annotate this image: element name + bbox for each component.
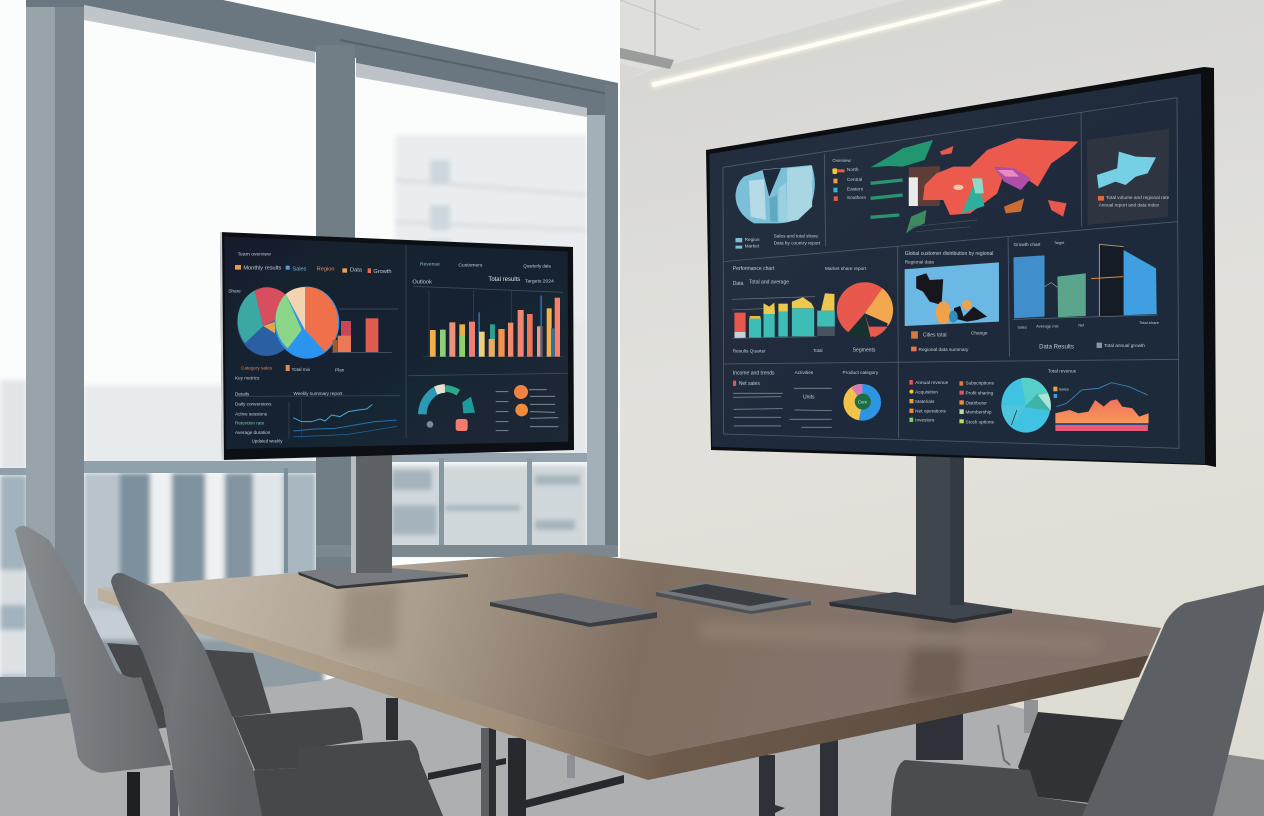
bottom legends: Net operations (915, 409, 947, 414)
bottom left list: Activities (795, 370, 814, 375)
small monitor headings: Key metrics (235, 375, 260, 380)
small monitor headings: Region (317, 267, 335, 273)
bottom legends: Sales (1059, 387, 1069, 392)
legend: globe: Sales and total share (774, 234, 818, 239)
bottom legends: Subscriptions (966, 380, 994, 385)
pie chart teal (1001, 378, 1051, 433)
bottom legends: Investors (915, 418, 935, 423)
small monitor headings: Targets 2024 (525, 278, 554, 284)
legend: globe: Region (745, 237, 760, 242)
small monitor headings: Team overview (238, 251, 271, 257)
stacked bar chart: Data (733, 281, 744, 287)
small monitor headings: Daily conversions (235, 401, 272, 406)
inset chart: Annual report and data index (1099, 203, 1160, 208)
bar chart blue and green: Average mix (1036, 323, 1059, 328)
bottom legends: Materials (915, 399, 935, 404)
map panel: Cities total (923, 333, 947, 339)
map panel: Regional data (905, 259, 934, 264)
monitor stand: large (829, 455, 1012, 623)
small monitor headings: Updated weekly (252, 438, 283, 443)
stacked bar chart: Segments (853, 347, 876, 353)
bottom legends: Membership (966, 409, 992, 414)
small monitor line chart (289, 398, 397, 438)
legend: globe: Data by country report (774, 240, 821, 245)
small monitor headings: Weekly summary report (293, 391, 343, 396)
area chart (1055, 383, 1149, 431)
bottom left list: Units (803, 395, 815, 401)
small monitor gauge (422, 388, 475, 431)
small monitor pie front (275, 287, 339, 359)
legend: globe: Eastern (847, 186, 864, 191)
stacked bar chart: Market share report (825, 266, 867, 271)
small monitor pie back (237, 287, 296, 356)
donut chart (843, 384, 881, 421)
chair: far left back (15, 526, 171, 773)
inset chart (1087, 129, 1170, 225)
map panel: Regional data summary (919, 347, 969, 352)
large monitor (706, 67, 1216, 467)
small monitor headings: Plan (335, 367, 345, 372)
bottom legends: Acquisition (915, 390, 938, 395)
map panel: Change (971, 330, 988, 335)
bar chart blue and green: Growth chart (1013, 242, 1041, 247)
bar chart blue and green: Target (1054, 241, 1064, 245)
small monitor headings: Average duration (235, 430, 271, 435)
bottom legends (909, 368, 1077, 424)
ceiling (223, 0, 905, 83)
stacked bar chart: Results Quarter (733, 349, 766, 354)
legend: globe: Southern (847, 195, 866, 200)
stacked bar chart: Performance chart (733, 266, 775, 272)
map panel (905, 251, 999, 352)
chair: far left seat (107, 643, 363, 770)
small monitor headings: Customers (458, 263, 483, 269)
pie chart (837, 282, 893, 338)
small monitor headings: Total results (488, 277, 520, 283)
stacked bar chart: Total and average (749, 279, 789, 285)
world map (871, 138, 1078, 233)
donut chart: Core (858, 399, 868, 404)
small monitor headings: Growth (373, 269, 392, 275)
legend: globe: Market (745, 243, 760, 248)
small monitor headings: Monthly results (243, 266, 282, 272)
bottom legends: Distributor (966, 400, 987, 405)
bar chart blue and green: Total annual growth (1104, 343, 1145, 348)
bottom legends: Stock options (966, 419, 995, 424)
bottom left list: Net sales (739, 381, 760, 387)
legend: globe: Central (847, 177, 862, 182)
small monitor (220, 232, 574, 460)
window with blurred city view (0, 0, 620, 720)
small monitor headings: Quarterly data (523, 264, 551, 269)
small monitor headings: Outlook (412, 280, 432, 286)
chair: right (891, 585, 1264, 816)
bar chart blue and green: Sales (1018, 325, 1027, 329)
window frame (0, 0, 618, 722)
small monitor side bars (332, 309, 398, 353)
small monitor bar chart (423, 290, 563, 357)
legend: globe: Overview (832, 158, 852, 163)
monitor stand: small (298, 452, 468, 589)
small monitor headings (228, 251, 554, 443)
bar chart blue and green: Data Results (1039, 345, 1074, 351)
small monitor orange dots (496, 385, 558, 431)
table (98, 552, 1161, 780)
ceiling light strips (336, 0, 1006, 88)
small monitor headings: Retention rate (235, 421, 265, 426)
bar chart blue and green: Total share (1139, 320, 1160, 325)
small monitor headings: Details (235, 392, 250, 397)
bottom left list: Product category (843, 370, 879, 375)
small monitor headings: Sales (292, 266, 307, 272)
bar chart blue and green (1013, 241, 1160, 351)
chair: near left (111, 573, 443, 816)
inset chart: Total volume and regional rate (1106, 195, 1170, 200)
wall (600, 0, 1264, 816)
stacked bar chart (732, 266, 876, 354)
bottom legends: Annual revenue (915, 380, 949, 385)
small monitor headings: Total mix (292, 367, 311, 372)
floor (0, 600, 1264, 816)
keyboard on table (656, 582, 811, 614)
panel: globe (735, 165, 815, 223)
small monitor headings: Category sales (241, 366, 273, 371)
bar chart blue and green: Net (1078, 324, 1084, 328)
bottom left list: Income and trends (733, 371, 775, 377)
large monitor screen (709, 73, 1205, 464)
small monitor headings: Active sessions (235, 411, 268, 416)
small monitor headings: Share (228, 289, 241, 294)
small monitor headings: Revenue (420, 262, 440, 268)
stacked bar chart: Total (813, 348, 822, 353)
bottom legends: Total revenue (1048, 368, 1077, 373)
small monitor screen (224, 237, 568, 449)
map panel: Global customer distribution by regional (905, 251, 993, 257)
table legs and supports (386, 698, 1038, 816)
bottom legends: Profit sharing (966, 390, 994, 395)
small monitor headings: Data (350, 267, 363, 273)
tablet on table (490, 593, 657, 627)
legend: globe: North (847, 167, 859, 172)
bottom left list (733, 370, 879, 427)
legend: globe (735, 158, 866, 249)
